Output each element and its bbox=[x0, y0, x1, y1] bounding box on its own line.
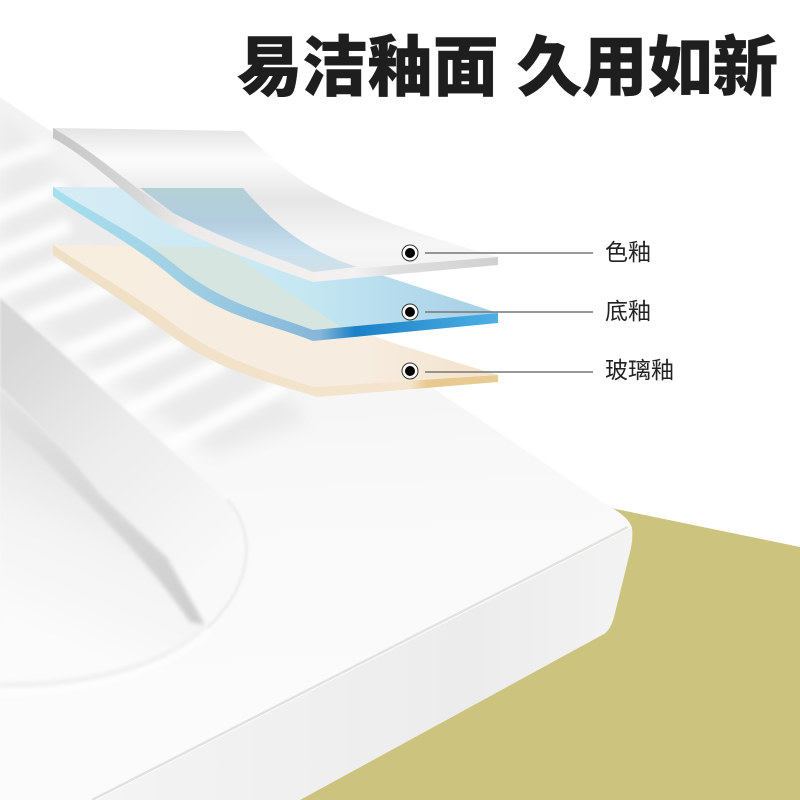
marker bbox=[402, 304, 418, 320]
label: 玻璃釉 bbox=[605, 357, 674, 383]
label: 色釉 bbox=[605, 239, 651, 265]
basin lip highlight bbox=[0, 630, 209, 693]
sink side face bbox=[92, 528, 632, 800]
ribbed anti-slip area bbox=[0, 170, 296, 448]
raised band beside the basin bbox=[0, 298, 245, 626]
callout: 底釉 bbox=[402, 298, 651, 324]
band curve rim bbox=[207, 500, 246, 628]
layer stack bbox=[53, 128, 498, 397]
tan layer: 玻璃釉 bbox=[53, 245, 498, 397]
white sink body bbox=[0, 97, 632, 800]
marker bbox=[402, 245, 418, 261]
label: 底釉 bbox=[605, 298, 651, 324]
floor: olive surface bbox=[300, 507, 800, 800]
leader line bbox=[425, 252, 593, 254]
basin recess bbox=[0, 387, 205, 688]
marker bbox=[402, 363, 418, 379]
sink top surface bbox=[0, 97, 632, 800]
callout: 玻璃釉 bbox=[402, 357, 674, 383]
title: 易洁釉面 久用如新 bbox=[237, 31, 778, 104]
sink front edge line bbox=[92, 527, 628, 800]
basin lip shading bbox=[0, 628, 205, 685]
basin inner shadow bbox=[0, 392, 205, 625]
grey layer: 色釉 bbox=[53, 128, 498, 282]
callout: 色釉 bbox=[402, 239, 651, 265]
blue layer: 底釉 bbox=[53, 187, 498, 341]
leader line bbox=[425, 311, 593, 313]
leader line bbox=[425, 371, 593, 373]
